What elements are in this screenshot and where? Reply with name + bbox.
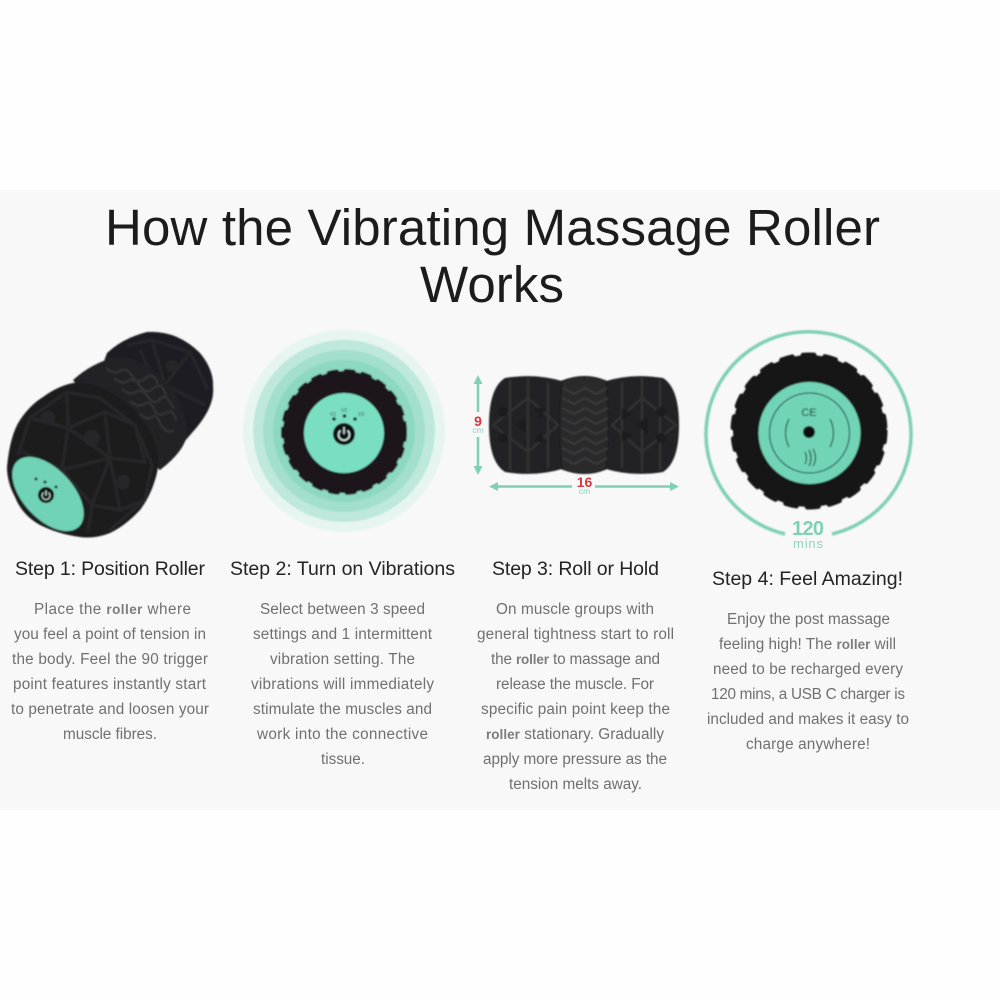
text block: step 3 [477, 601, 674, 793]
icon: roller end with vibration rings [243, 330, 445, 532]
text block: step 3: specific pain point keep the [481, 701, 670, 718]
text block: step 4: feeling high! The roller will [719, 636, 896, 653]
arrow: height dimension: cm [472, 425, 484, 435]
text block: step 2: tissue. [321, 751, 365, 768]
text block: step 3: the roller to massage and [491, 651, 660, 668]
label: 120 mins: 120 [792, 518, 824, 540]
text block: step 1: to penetrate and loosen your [11, 701, 209, 718]
text block: step 2: Select between 3 speed [260, 601, 425, 618]
title [105, 199, 880, 313]
arrow: width dimension [489, 474, 679, 496]
text block: step 2: settings and 1 intermittent [253, 626, 433, 643]
text block: step 4: need to be recharged every [713, 661, 903, 678]
title: Works [420, 256, 564, 313]
text block: step 2 [251, 601, 434, 768]
text block: step 4: included and makes it easy to [707, 711, 909, 728]
text block: step 4 [707, 611, 909, 753]
heading: step 1: Step 1: Position Roller [15, 558, 206, 580]
text block: step 4: 120 mins, a USB C charger is [711, 686, 905, 703]
panel: step 3 [472, 375, 679, 793]
panel: step 1 [0, 332, 213, 743]
text block: step 1: you feel a point of tension in [14, 626, 206, 643]
text block: step 3: release the muscle. For [496, 676, 654, 693]
text block: step 3: apply more pressure as the [483, 751, 667, 768]
icon: angled roller with teal control face [0, 332, 213, 544]
text block: step 3: tension melts away. [509, 776, 642, 793]
panel: background band [0, 190, 1000, 810]
icon: roller side view [489, 376, 679, 474]
text block: step 3: general tightness start to roll [477, 626, 674, 643]
label: 120 mins: mins [793, 536, 824, 551]
text block: step 1 [11, 601, 209, 743]
text block: step 1: the body. Feel the 90 trigger [12, 651, 208, 668]
arrow: width dimension: cm [579, 486, 590, 496]
panel: step 4 [706, 332, 911, 753]
arrow: height dimension: 9 [474, 413, 482, 429]
icon: roller end with vibration rings: V3 [358, 412, 364, 418]
heading: step 3: Step 3: Roll or Hold [492, 558, 659, 580]
panel: step 2 [230, 330, 455, 768]
text block: step 2: work into the connective [256, 726, 428, 743]
text block: step 4: Enjoy the post massage [727, 611, 890, 628]
text block: step 2: stimulate the muscles and [253, 701, 432, 718]
icon: roller end with vibration rings: V1 [330, 412, 336, 418]
arrow: width dimension: 16 [577, 474, 592, 490]
text block: step 1: point features instantly start [13, 676, 207, 693]
heading: step 2: Step 2: Turn on Vibrations [230, 558, 455, 580]
text block: step 1: Place the roller where [34, 601, 191, 618]
text block: step 4: charge anywhere! [746, 736, 870, 753]
icon: roller end with vibration rings: V2 [341, 408, 347, 414]
icon: roller end in battery ring [706, 332, 911, 534]
text block: step 2: vibrations will immediately [251, 676, 434, 693]
label: 120 mins [792, 518, 824, 551]
icon: roller end in battery ring: CE [801, 407, 817, 419]
arrow: height dimension [472, 375, 484, 475]
text block: step 2: vibration setting. The [270, 651, 415, 668]
heading: step 4: Step 4: Feel Amazing! [712, 568, 903, 590]
title: How the Vibrating Massage Roller [105, 199, 880, 256]
text block: step 3: roller stationary. Gradually [486, 726, 664, 743]
text block: step 3: On muscle groups with [496, 601, 654, 618]
text block: step 1: muscle fibres. [63, 726, 157, 743]
